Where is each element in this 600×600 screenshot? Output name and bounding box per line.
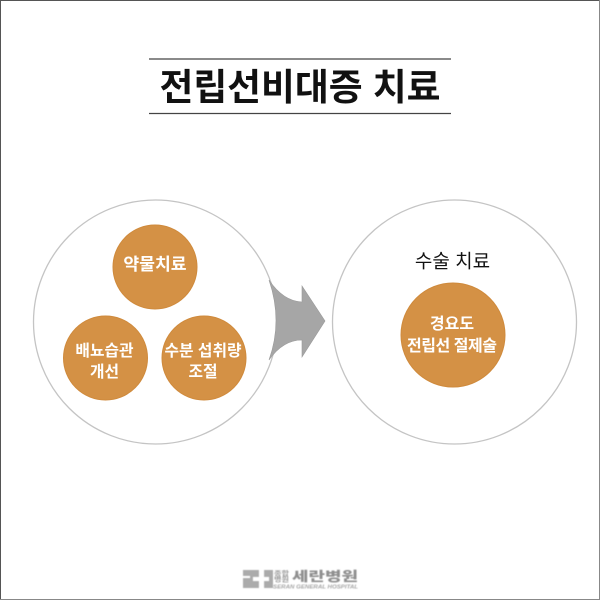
logo: hospital <box>243 568 359 590</box>
circle: fluid intake: 수분 섭취량 <box>164 342 242 360</box>
logo: hospital: SERAN GENERAL HOSPITAL <box>273 584 359 590</box>
logo: hospital: 종합 <box>274 568 289 578</box>
logo: hospital: 세란병원 <box>292 569 358 584</box>
panel: surgical treatment <box>332 200 576 444</box>
circle: TURP: 경요도 <box>430 315 474 333</box>
circle: voiding habits: 개선 <box>90 363 119 381</box>
circle: voiding habits <box>64 316 148 400</box>
circle: medication <box>113 225 197 309</box>
title: 전립선비대증 치료 <box>159 67 441 108</box>
icon: cross <box>243 570 273 588</box>
circle: TURP <box>401 283 505 387</box>
logo: hospital: 병원 <box>274 574 289 584</box>
label: surgery: 수술 치료 <box>415 250 490 272</box>
circle: voiding habits: 배뇨습관 <box>75 342 134 360</box>
circle: fluid intake <box>162 316 246 400</box>
circle: fluid intake: 조절 <box>188 363 218 381</box>
circle: medication: 약물치료 <box>123 254 187 274</box>
panel: non-surgical treatment <box>34 200 278 444</box>
circle: TURP: 전립선 절제술 <box>407 337 497 355</box>
arrow <box>269 280 325 360</box>
